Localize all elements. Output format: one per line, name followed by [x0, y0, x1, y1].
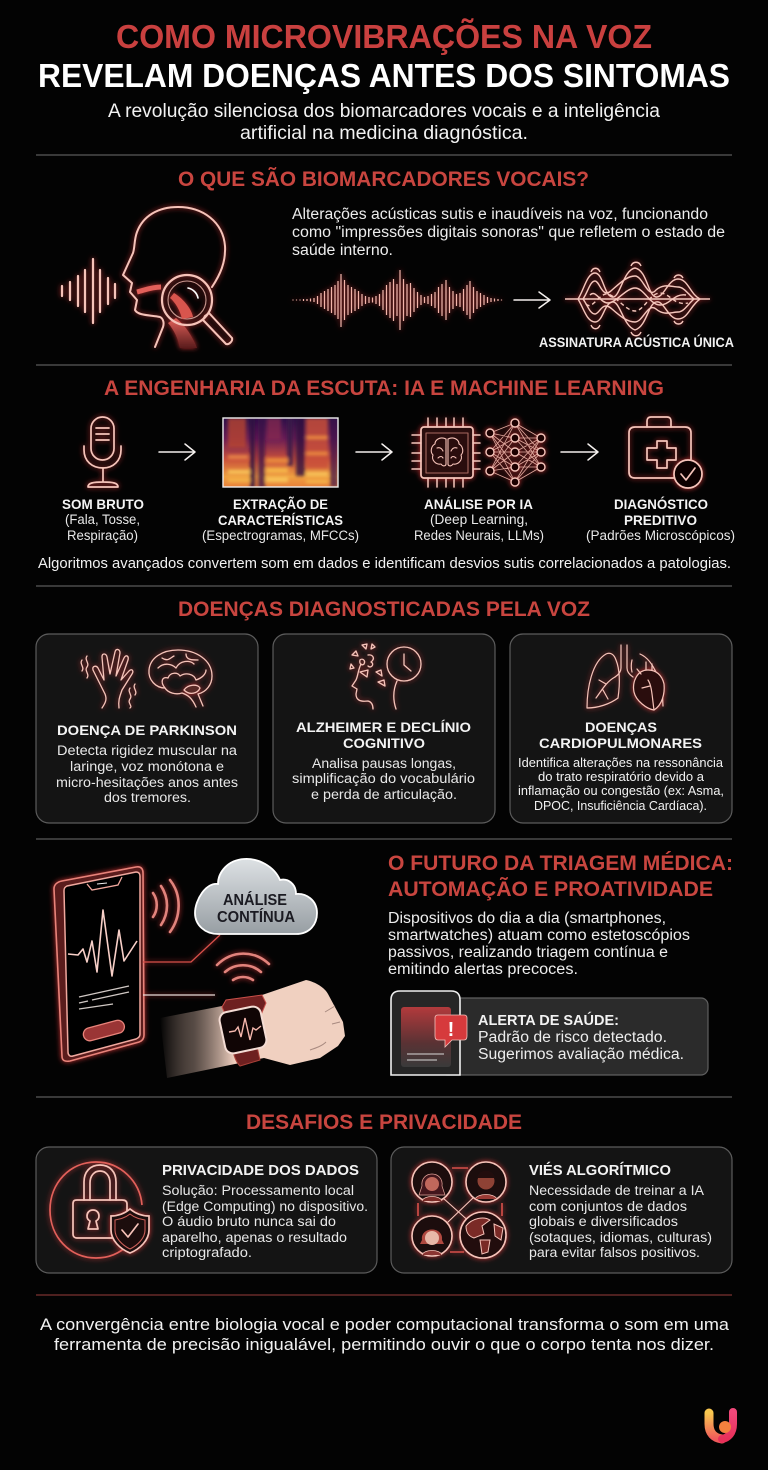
icon: wifi waves [217, 954, 269, 980]
conclusion: A convergência entre biologia vocal e poder computacional transforma o som em uma [40, 1315, 730, 1334]
text: Parkinson: dos tremores. [104, 790, 191, 805]
step label: som bruto: SOM BRUTO [62, 496, 144, 512]
description: como "impressões digitais sonoras" que refletem o estado de [292, 224, 725, 241]
section: biomarcadores vocais [62, 168, 734, 350]
description: dispositivos: Dispositivos do dia a dia (smartphones, [388, 910, 666, 927]
step label: análise: Redes Neurais, LLMs) [414, 528, 544, 543]
text: alert [478, 1011, 684, 1063]
step label: análise: (Deep Learning, [430, 512, 528, 527]
text: Alzheimer: e perda de articulação. [311, 787, 457, 802]
step label: extração [202, 495, 359, 543]
title [38, 18, 730, 94]
step label: diagnóstico [586, 495, 735, 543]
icon: cloud: CONTÍNUA [217, 907, 295, 926]
panel: Parkinson [36, 634, 258, 823]
text: cardiopulmonares: DOENÇAS [585, 719, 657, 735]
step label: diagnóstico: (Padrões Microscópicos) [586, 528, 735, 543]
subtitle: A revolução silenciosa dos biomarcadores vocais e a inteligência [108, 100, 660, 122]
icon: sound wave [62, 259, 115, 323]
icon: cloud: ANÁLISE [223, 890, 287, 909]
icon: AI chip [412, 418, 480, 487]
text: Parkinson: DOENÇA DE PARKINSON [57, 722, 237, 738]
text: viés: globais e diversificados [529, 1214, 678, 1229]
text: Parkinson: micro-hesitações anos antes [56, 775, 238, 790]
icon: neural network [486, 419, 545, 486]
subtitle [108, 100, 660, 144]
conclusion: ferramenta de precisão inigualável, permitindo ouvir o que o corpo tenta nos dizer. [54, 1335, 714, 1354]
section: doenças [36, 598, 732, 823]
icon: diverse people and globe [412, 1162, 506, 1258]
text: cardiopulmonares: inflamação ou congestão (ex: Asma, [518, 784, 724, 798]
text: Parkinson [56, 722, 238, 805]
section: futuro da triagem [54, 852, 733, 1078]
icon: phone signal waves [153, 880, 179, 932]
text: privacidade: (Edge Computing) no dispositivo. [162, 1199, 368, 1214]
panel: privacidade [36, 1147, 377, 1273]
text: Alzheimer: simplificação do vocabulário [292, 771, 475, 786]
description: dispositivos: smartwatches) atuam como estetoscópios [388, 927, 690, 944]
heading: futuro: AUTOMAÇÃO E PROATIVIDADE [388, 878, 713, 901]
heading: desafios: DESAFIOS E PRIVACIDADE [246, 1111, 522, 1134]
connector lines [143, 935, 220, 995]
step label: som bruto: Respiração) [67, 528, 138, 543]
icon: brain [149, 650, 212, 707]
heading: futuro: O FUTURO DA TRIAGEM MÉDICA: [388, 852, 733, 875]
description: Alterações acústicas sutis e inaudíveis na voz, funcionando [292, 206, 708, 223]
step label: som bruto [62, 496, 144, 543]
step label: som bruto: (Fala, Tosse, [65, 512, 140, 527]
text: Alzheimer [292, 719, 475, 802]
text: viés: (sotaques, idiomas, culturas) [529, 1230, 712, 1245]
text: cardiopulmonares: Identifica alterações na ressonância [518, 756, 723, 770]
arrow [356, 444, 392, 460]
caption: algoritmos: Algoritmos avançados convertem som em dados e identificam desvios sutis correlacionados a patologias. [38, 555, 731, 572]
text: privacidade: Solução: Processamento local [162, 1183, 354, 1198]
section: desafios [36, 1111, 732, 1273]
icon: head with magnifier [123, 207, 232, 348]
text: privacidade: PRIVACIDADE DOS DADOS [162, 1162, 359, 1179]
description [292, 206, 725, 259]
text: Parkinson: laringe, voz monótona e [70, 759, 224, 774]
panel: health alert [391, 991, 708, 1075]
acoustic signature [565, 262, 710, 336]
icon: medical kit [629, 417, 702, 488]
text: cardiopulmonares: do trato respiratório devido a [538, 770, 704, 784]
description: dispositivos: passivos, realizando triagem contínua e [388, 944, 668, 961]
text: cardiopulmonares: CARDIOPULMONARES [539, 735, 702, 751]
panel: cardiopulmonares [510, 634, 732, 823]
step label: extração: EXTRAÇÃO DE [233, 495, 328, 512]
text: alert: Sugerimos avaliação médica. [478, 1046, 684, 1063]
heading: doenças: DOENÇAS DIAGNOSTICADAS PELA VOZ [178, 598, 590, 621]
step label: extração: CARACTERÍSTICAS [218, 512, 343, 528]
description: saúde interno. [292, 242, 393, 259]
description: dispositivos: emitindo alertas precoces. [388, 961, 578, 978]
title: REVELAM DOENÇAS ANTES DOS SINTOMAS [38, 57, 730, 94]
icon: alert phone: ! [448, 1019, 454, 1041]
text: viés: com conjuntos de dados [529, 1199, 687, 1214]
icon: lock and shield [50, 1162, 149, 1258]
illustration: devices [54, 859, 345, 1078]
text: viés: VIÉS ALGORÍTMICO [529, 1162, 671, 1179]
text: cardiopulmonares [518, 719, 724, 813]
arrow [514, 292, 550, 308]
description: dispositivos [388, 910, 690, 978]
heading: biomarcadores: O QUE SÃO BIOMARCADORES VOCAIS? [178, 168, 589, 191]
text: Alzheimer: ALZHEIMER E DECLÍNIO [296, 719, 471, 735]
text: Alzheimer: Analisa pausas longas, [312, 756, 456, 771]
text: privacidade [162, 1162, 368, 1260]
text: cardiopulmonares: DPOC, Insuficiência Cardíaca). [534, 799, 707, 813]
title: COMO MICROVIBRAÇÕES NA VOZ [116, 18, 652, 55]
section: engenharia da escuta [38, 377, 735, 572]
text: viés [529, 1162, 712, 1260]
icon: trembling hand [81, 649, 136, 708]
icon: lungs and heart [587, 645, 664, 710]
heading: engenharia: A ENGENHARIA DA ESCUTA: IA E MACHINE LEARNING [104, 377, 664, 400]
icon: alert phone [391, 991, 467, 1075]
step label: diagnóstico: PREDITIVO [624, 512, 697, 528]
heading: futuro [388, 852, 733, 901]
icon: arm and watch [160, 980, 345, 1078]
conclusion [40, 1315, 730, 1354]
panel: viés algorítmico [391, 1147, 732, 1273]
step label: análise [414, 496, 544, 543]
text: privacidade: criptografado. [162, 1245, 252, 1260]
text: viés: para evitar falsos positivos. [529, 1245, 700, 1260]
waveform [293, 270, 502, 330]
icon: cloud [195, 859, 317, 934]
icon: microphone [84, 417, 121, 487]
icon: head with clock [350, 644, 421, 709]
spectrogram [223, 416, 338, 488]
arrow [159, 444, 195, 460]
text: Alzheimer: COGNITIVO [343, 735, 425, 751]
step label: diagnóstico: DIAGNÓSTICO [614, 495, 708, 512]
subtitle: artificial na medicina diagnóstica. [240, 122, 528, 144]
step label: análise: ANÁLISE POR IA [424, 496, 533, 512]
icon: logo [709, 1412, 733, 1439]
step label: extração: (Espectrogramas, MFCCs) [202, 528, 359, 543]
text: viés: Necessidade de treinar a IA [529, 1183, 704, 1198]
text: Parkinson: Detecta rigidez muscular na [57, 743, 238, 758]
text: alert: ALERTA DE SAÚDE: [478, 1011, 619, 1029]
text: privacidade: aparelho, apenas o resultado [162, 1230, 347, 1245]
panel: Alzheimer [273, 634, 495, 823]
icon: smartphone [54, 867, 144, 1061]
text: alert: Padrão de risco detectado. [478, 1029, 667, 1046]
arrow [561, 444, 598, 460]
text: privacidade: O áudio bruto nunca sai do [162, 1214, 336, 1229]
caption: ASSINATURA ACÚSTICA ÚNICA [539, 335, 734, 350]
